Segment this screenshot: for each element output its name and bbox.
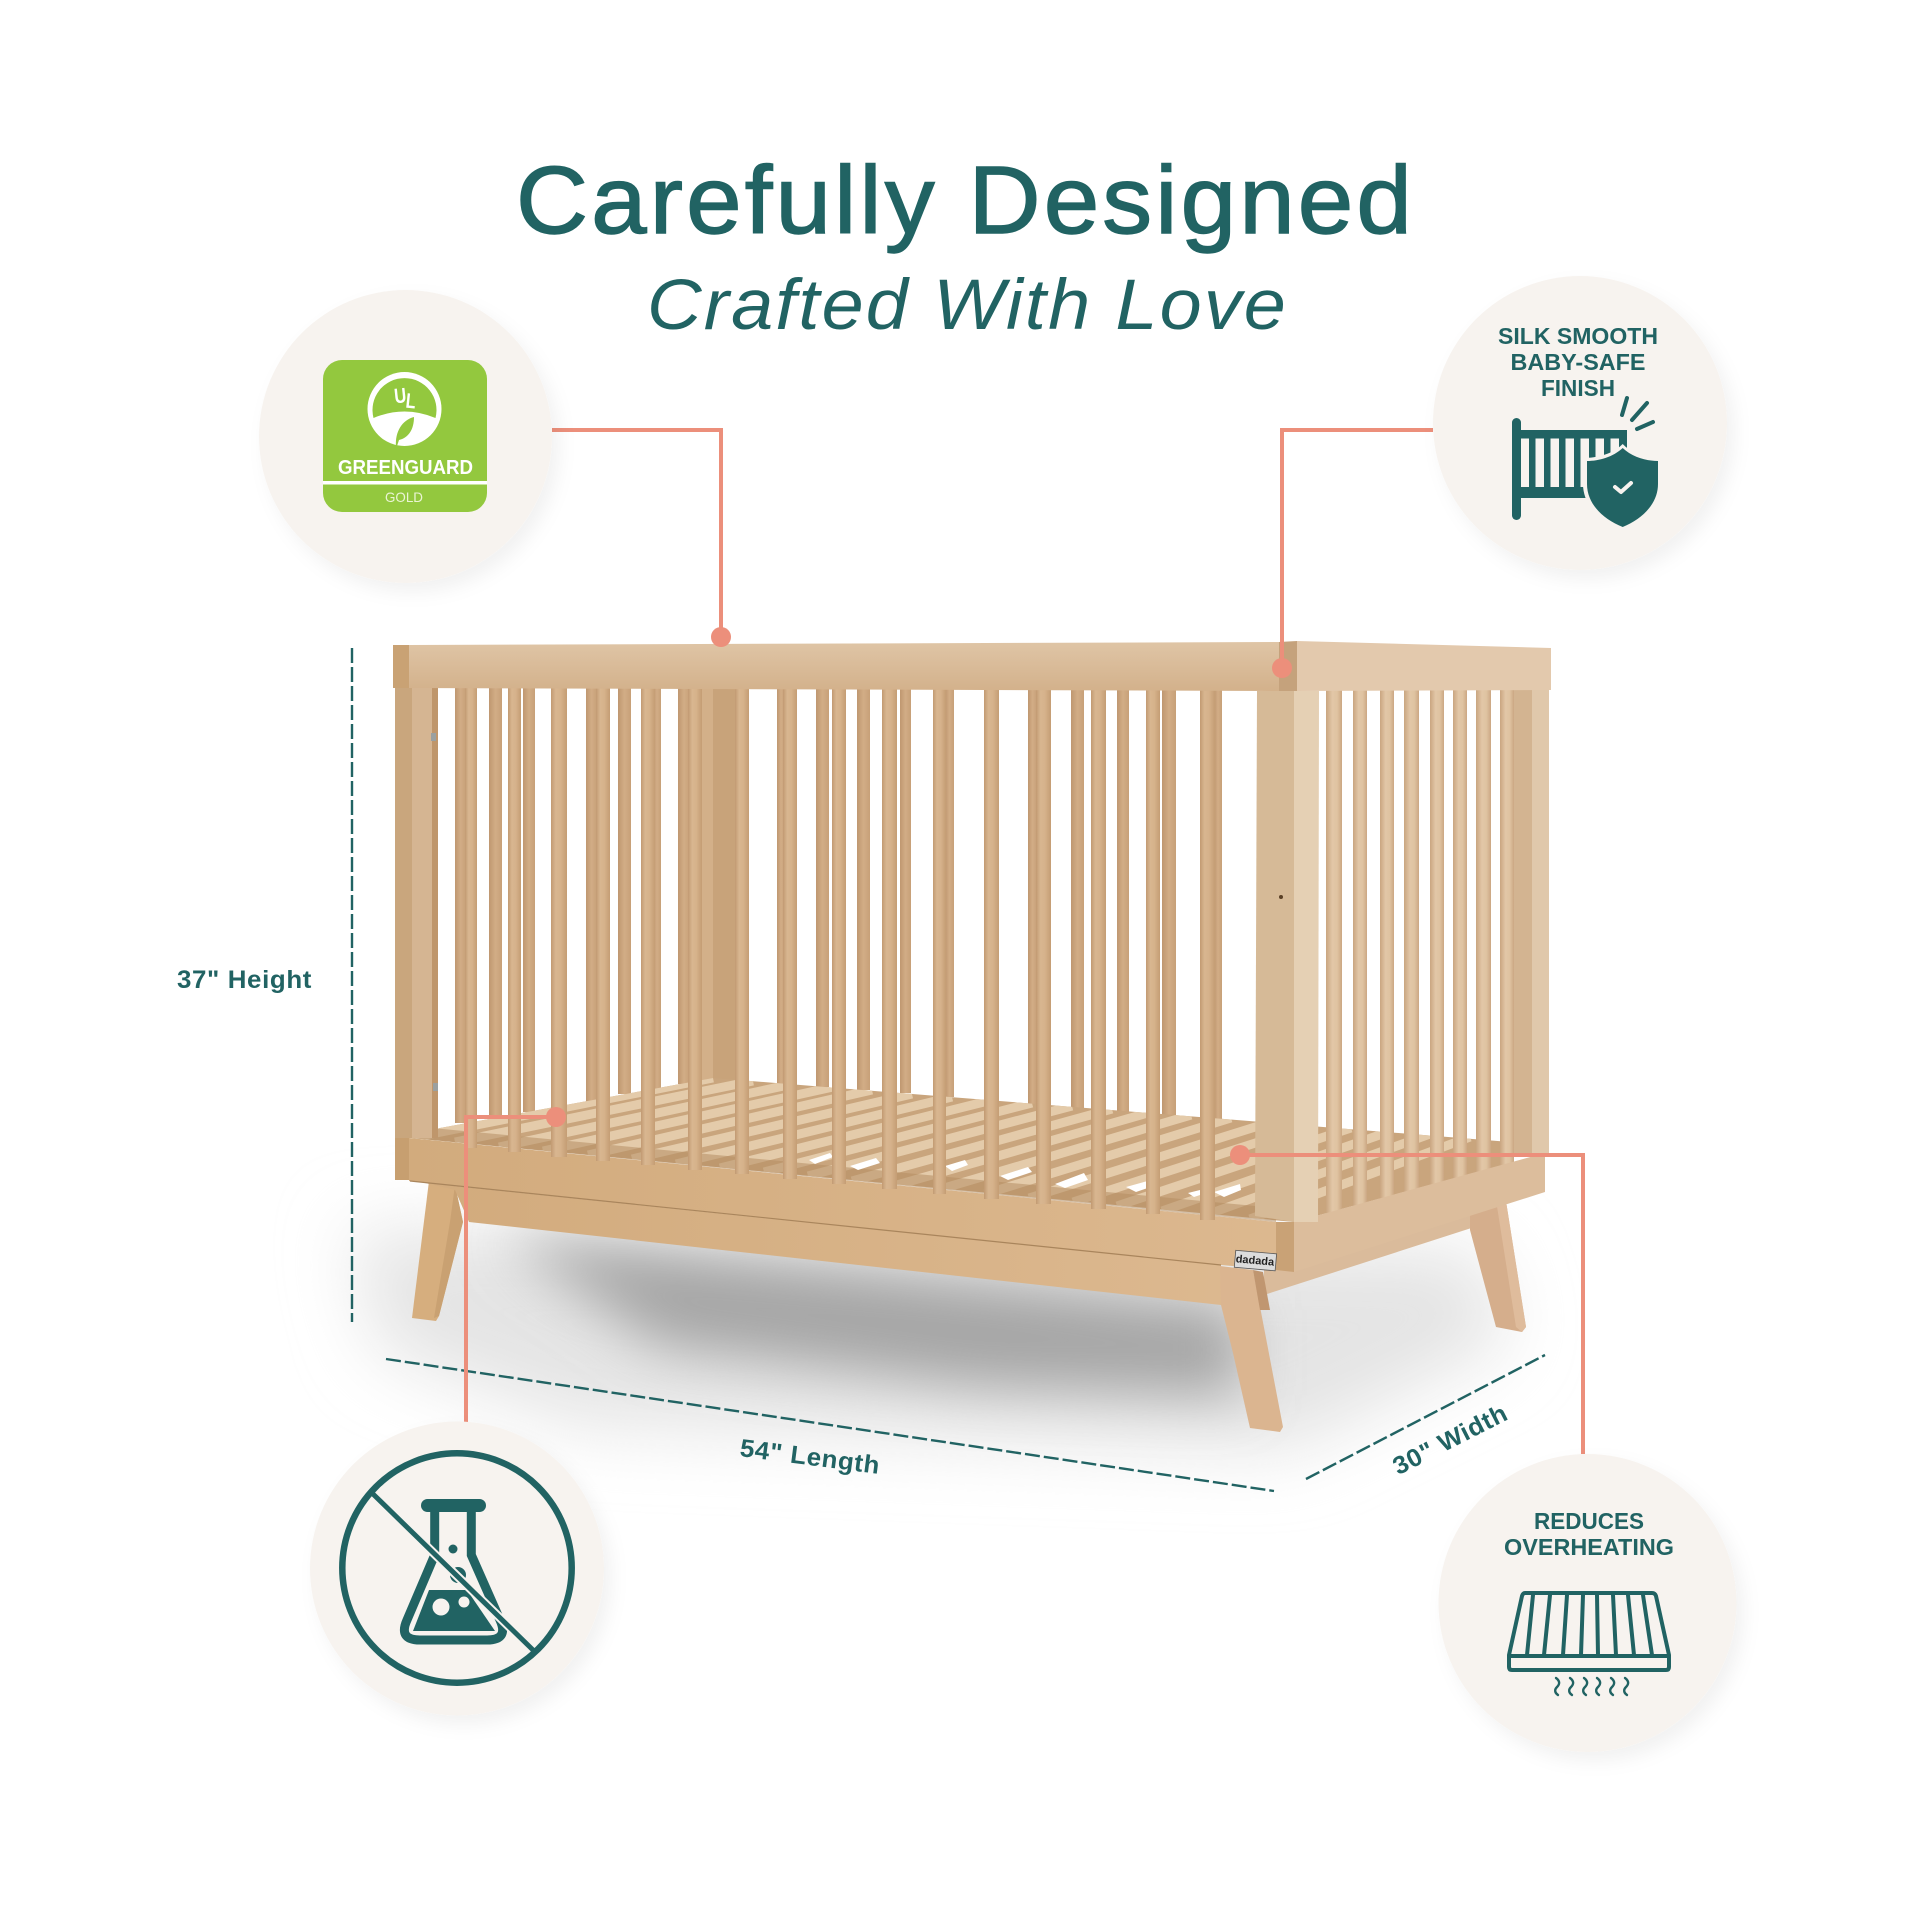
legs and under-beam: [412, 1181, 1526, 1332]
finish heading: [1498, 323, 1658, 401]
brand tag: dadada: [1235, 1253, 1275, 1269]
back right post: [1514, 690, 1549, 1155]
icon: slatted mattress with heat waves: [1509, 1593, 1669, 1695]
overheating heading: REDUCES: [1534, 1508, 1644, 1534]
finish heading: BABY-SAFE: [1510, 349, 1646, 375]
back and side spindles: [455, 688, 1222, 1123]
title: Carefully Designed: [516, 147, 1415, 254]
subtitle: Crafted With Love: [647, 266, 1288, 345]
dimension: length line: [386, 1359, 1274, 1491]
callout line: overheating: [1230, 1145, 1583, 1454]
right side spindles: [1326, 690, 1514, 1215]
callout line: finish: [1272, 430, 1433, 678]
dimension: height label: 37" Height: [177, 966, 312, 994]
mattress support slats: [411, 1078, 1510, 1222]
overheating heading: OVERHEATING: [1504, 1534, 1674, 1560]
dimension: width line: [1306, 1355, 1545, 1479]
panel: reduces overheating circle: [1438, 1454, 1736, 1752]
finish heading: SILK SMOOTH: [1498, 323, 1658, 349]
icon: greenguard gold badge: GREENGUARD: [338, 457, 473, 479]
callout line: greenguard: [552, 430, 731, 647]
crib illustration: [393, 641, 1551, 1432]
icon: greenguard gold badge: U: [393, 384, 407, 408]
icon: greenguard gold badge: L: [405, 390, 417, 414]
panel: no chemicals circle: [310, 1422, 604, 1716]
icon: greenguard gold badge: GOLD: [385, 489, 423, 505]
callout line: no chemicals: [466, 1107, 566, 1422]
dimension: width label: 30" Width: [1388, 1399, 1512, 1481]
icon: flask with prohibition sign: [342, 1453, 572, 1683]
front right corner post: [1255, 691, 1319, 1222]
front base rails: [395, 1138, 1545, 1432]
panel: greenguard badge circle: [259, 290, 552, 583]
finish heading: FINISH: [1541, 375, 1615, 401]
front spindles: [465, 688, 1215, 1220]
brand tag: [1234, 1250, 1277, 1271]
overheating heading: [1504, 1508, 1674, 1560]
floor shadow: [350, 1230, 1510, 1450]
dimension: length label: 54" Length: [738, 1434, 882, 1480]
panel: baby-safe finish circle: [1433, 276, 1727, 570]
back corner post: [690, 688, 736, 1080]
icon: greenguard gold badge: [323, 360, 487, 512]
icon: crib with shield: [1512, 398, 1662, 531]
top rails: [393, 641, 1551, 691]
front left post: [395, 688, 438, 1138]
dimension: height line: [351, 648, 353, 1322]
